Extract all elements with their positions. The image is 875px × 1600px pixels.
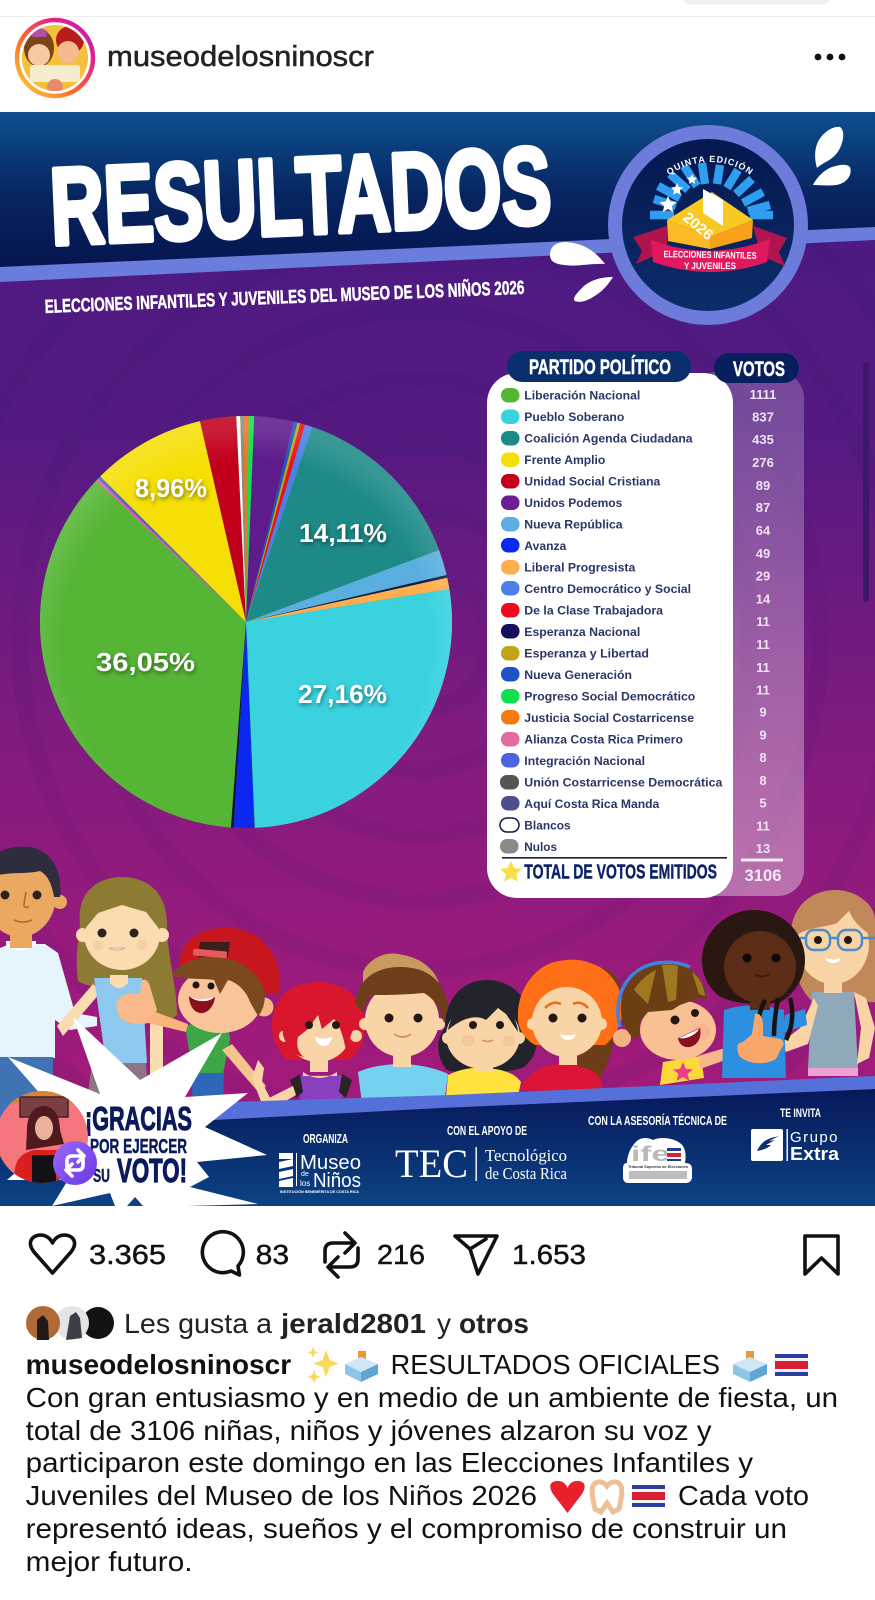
reposter avatar	[0, 1091, 88, 1183]
vote counts: 11	[756, 818, 770, 834]
repost badge	[53, 1141, 97, 1185]
vote counts: 89	[756, 478, 770, 493]
emoji: flag	[775, 1354, 808, 1376]
logo: TSE IFED	[588, 1113, 727, 1183]
total label: TOTAL DE VOTOS EMITIDOS	[524, 862, 717, 884]
character: black hair girl	[438, 980, 537, 1096]
icon: repost	[325, 1233, 358, 1277]
header: partido político: PARTIDO POLÍTICO	[529, 356, 671, 379]
election badge	[608, 125, 808, 325]
username: museodelosninoscr	[107, 41, 374, 73]
ribbon text: ELECCIONES INFANTILES	[663, 249, 757, 262]
party names: Integración Nacional	[524, 754, 645, 768]
logo: Museo de los Niños: los	[300, 1179, 310, 1188]
liked by text: Les gusta a	[124, 1308, 272, 1339]
party names: Unión Costarricense Democrática	[524, 775, 723, 789]
ribbon tails	[633, 226, 787, 266]
sponsors	[279, 1106, 840, 1194]
vote counts: 435	[752, 432, 774, 447]
ribbon	[651, 239, 770, 272]
logo: TEC: TEC	[395, 1141, 468, 1186]
party names: Esperanza y Libertad	[524, 646, 649, 660]
party names: De la Clase Trabajadora	[524, 603, 663, 617]
share count: 1.653	[512, 1239, 586, 1270]
percentage labels: 8,96%	[135, 475, 207, 503]
total rule	[502, 857, 783, 862]
year: 2026	[679, 209, 716, 244]
icon: share	[455, 1236, 497, 1274]
emoji: ballot box	[345, 1351, 378, 1382]
ballot box	[667, 192, 753, 249]
caption body: total de 3106 niñas, niños y jóvenes alzaron su voz y	[26, 1415, 711, 1446]
emoji: sparkles	[308, 1347, 338, 1384]
caption body: Cada voto	[678, 1480, 809, 1511]
header: partido político	[507, 351, 691, 382]
liked by row	[26, 1306, 529, 1340]
logo: Grupo Extra: TE INVITA	[780, 1106, 821, 1120]
thank-you text: ¡GRACIAS	[85, 1100, 192, 1137]
party names: Unidos Podemos	[524, 496, 623, 510]
post header	[17, 20, 845, 96]
slice: Pueblo Soberano	[246, 589, 452, 828]
party names: Aquí Costa Rica Manda	[524, 797, 660, 811]
logo: TEC	[395, 1124, 568, 1186]
white splashes	[550, 127, 851, 302]
character: woman with glasses	[782, 890, 875, 1076]
party names: Nulos	[524, 840, 557, 854]
logo: Museo de los Niños	[279, 1131, 361, 1194]
top status strip	[0, 0, 875, 17]
vote counts: 87	[756, 500, 770, 515]
liked by text: y	[437, 1308, 451, 1339]
caption	[26, 1347, 838, 1577]
icon: bookmark	[805, 1236, 838, 1274]
character: brown hair boy	[355, 954, 449, 1104]
logo: Grupo Extra	[751, 1106, 840, 1164]
party names: Nueva Generación	[524, 668, 632, 682]
logo: Museo de los Niños: de	[301, 1171, 309, 1178]
character: orange hair boy	[518, 960, 623, 1092]
lavender stripe	[0, 227, 875, 282]
character: red hair girl	[252, 982, 365, 1109]
character: girl with long hair	[57, 877, 177, 1100]
vote counts	[750, 387, 776, 856]
emoji: heart hands	[592, 1482, 622, 1512]
subtitle: ELECCIONES INFANTILES Y JUVENILES DEL MUSEO DE LOS NIÑOS 2026	[44, 277, 525, 318]
logo: TSE IFED: CON LA ASESORÍA TÉCNICA DE	[588, 1113, 727, 1128]
emoji: heart	[550, 1481, 585, 1513]
vote counts: 11	[756, 660, 770, 675]
vote counts: 5	[759, 796, 767, 810]
logo: TEC: de Costa Rica	[485, 1164, 568, 1183]
party names: Esperanza Nacional	[524, 625, 640, 639]
pie chart	[40, 416, 452, 828]
infographic image	[0, 112, 875, 1206]
liked by text: jerald2801	[280, 1308, 426, 1339]
caption body: participaron este domingo en las Elecciones Infantiles y	[26, 1447, 753, 1478]
party names: Progreso Social Democrático	[524, 689, 695, 703]
character: girl with headband	[613, 962, 745, 1085]
logo: TEC: CON EL APOYO DE	[447, 1124, 527, 1138]
sun rays	[650, 163, 773, 215]
logo: TSE IFED: ife	[631, 1143, 670, 1166]
slice: Coalición Agenda Ciudadana	[246, 427, 439, 622]
vote counts: 49	[756, 546, 770, 561]
party names	[524, 388, 723, 854]
legend swatches	[500, 388, 520, 854]
thank-you text	[85, 1100, 192, 1189]
arc text: QUINTA EDICIÓN	[667, 156, 753, 174]
vote counts: 837	[752, 410, 774, 424]
party names: Avanza	[524, 539, 567, 553]
icon: comment	[202, 1232, 243, 1275]
character: man	[0, 847, 97, 1137]
icon: heart	[30, 1235, 75, 1273]
logo: Grupo Extra: Grupo	[790, 1129, 839, 1146]
vote counts: 11	[756, 682, 770, 698]
liked by text	[124, 1308, 529, 1339]
comment count: 83	[256, 1239, 289, 1270]
profile avatar	[17, 20, 93, 96]
party names: Nueva República	[524, 517, 623, 531]
emoji: flag	[632, 1485, 665, 1507]
vote counts: 9	[759, 704, 767, 720]
stars	[660, 174, 697, 212]
thank-you text: VOTO!	[117, 1152, 187, 1189]
bottom navy band	[0, 1089, 875, 1206]
emoji: ballot box	[733, 1351, 767, 1382]
ballot paper	[703, 189, 723, 226]
caption line 1	[26, 1347, 808, 1384]
vote counts: 64	[756, 523, 771, 538]
children illustration	[0, 847, 875, 1137]
vote counts: 11	[756, 637, 770, 652]
party names: Unidad Social Cristiana	[524, 474, 661, 488]
vote counts: 14	[756, 592, 771, 606]
thank-you text: POR EJERCER	[90, 1135, 187, 1158]
ribbon text: Y JUVENILES	[684, 261, 736, 272]
vote counts: 8	[759, 750, 767, 765]
vote counts: 11	[756, 614, 770, 629]
logo: TEC: Tecnológico	[485, 1146, 567, 1165]
party names: Coalición Agenda Ciudadana	[524, 431, 693, 445]
liker avatars	[26, 1306, 114, 1340]
results table	[487, 351, 804, 898]
total value: 3106	[744, 866, 782, 885]
caption body	[26, 1382, 838, 1577]
vote counts: 1111	[750, 387, 776, 402]
slice: Liberación Nacional	[136, 512, 356, 732]
party names: Liberación Nacional	[524, 388, 640, 402]
party names: Centro Democrático y Social	[524, 582, 691, 596]
thank-you text: SU	[93, 1166, 110, 1186]
vote counts: 29	[756, 568, 770, 584]
party names: Alianza Costa Rica Primero	[524, 732, 683, 746]
percentage labels: 14,11%	[299, 520, 387, 548]
votes column panel	[708, 372, 804, 896]
star icon	[500, 861, 522, 882]
bottom lavender stripe	[213, 1076, 875, 1120]
like count: 3.365	[89, 1239, 166, 1270]
character: boy with red cap	[117, 928, 280, 1099]
purple background	[0, 240, 875, 1120]
character: girl with curly hair	[702, 910, 807, 1078]
header: votos: VOTOS	[733, 358, 785, 381]
liked by text: otros	[459, 1308, 529, 1339]
caption body: mejor futuro.	[26, 1546, 193, 1577]
percentage labels	[96, 475, 387, 709]
party names: Pueblo Soberano	[524, 410, 624, 424]
party names: Justicia Social Costarricense	[524, 711, 694, 725]
logo: Museo de los Niños: INSTITUCIÓN BENEMÉRITA DE COSTA RICA	[280, 1189, 359, 1194]
caption body: Juveniles del Museo de los Niños 2026	[26, 1480, 537, 1511]
header: votos	[714, 353, 799, 383]
caption line 1: RESULTADOS OFICIALES	[391, 1349, 720, 1380]
logo: Museo de los Niños: Museo	[300, 1152, 361, 1174]
vote counts: 13	[756, 841, 770, 856]
vote counts: 9	[759, 728, 767, 742]
vote counts: 8	[759, 773, 767, 788]
logo: Grupo Extra: Extra	[790, 1144, 840, 1164]
top navy band	[0, 112, 875, 268]
logo: Museo de los Niños: ORGANIZA	[303, 1131, 348, 1146]
party names: Blancos	[524, 818, 571, 832]
logo: Museo de los Niños: Niños	[313, 1170, 361, 1192]
caption body: Con gran entusiasmo y en medio de un ambiente de fiesta, un	[26, 1382, 838, 1413]
repost count: 216	[377, 1239, 425, 1270]
logo: TSE IFED: Tribunal Supremo de Elecciones	[628, 1164, 689, 1169]
action bar	[30, 1232, 838, 1277]
percentage labels: 27,16%	[298, 681, 387, 709]
caption line 1: museodelosninoscr	[26, 1349, 291, 1380]
party list panel	[487, 373, 733, 898]
title: RESULTADOS	[48, 125, 554, 268]
thank-you starburst	[7, 1017, 267, 1206]
slice: Frente Amplio	[100, 421, 246, 622]
ribbon text	[664, 250, 756, 269]
caption body: representó ideas, sueños y el compromiso de construir un	[26, 1513, 787, 1544]
vote counts: 276	[752, 455, 774, 470]
party names: Liberal Progresista	[524, 560, 636, 574]
more menu dots	[815, 54, 845, 60]
percentage labels: 36,05%	[96, 649, 195, 677]
party names: Frente Amplio	[524, 453, 605, 467]
